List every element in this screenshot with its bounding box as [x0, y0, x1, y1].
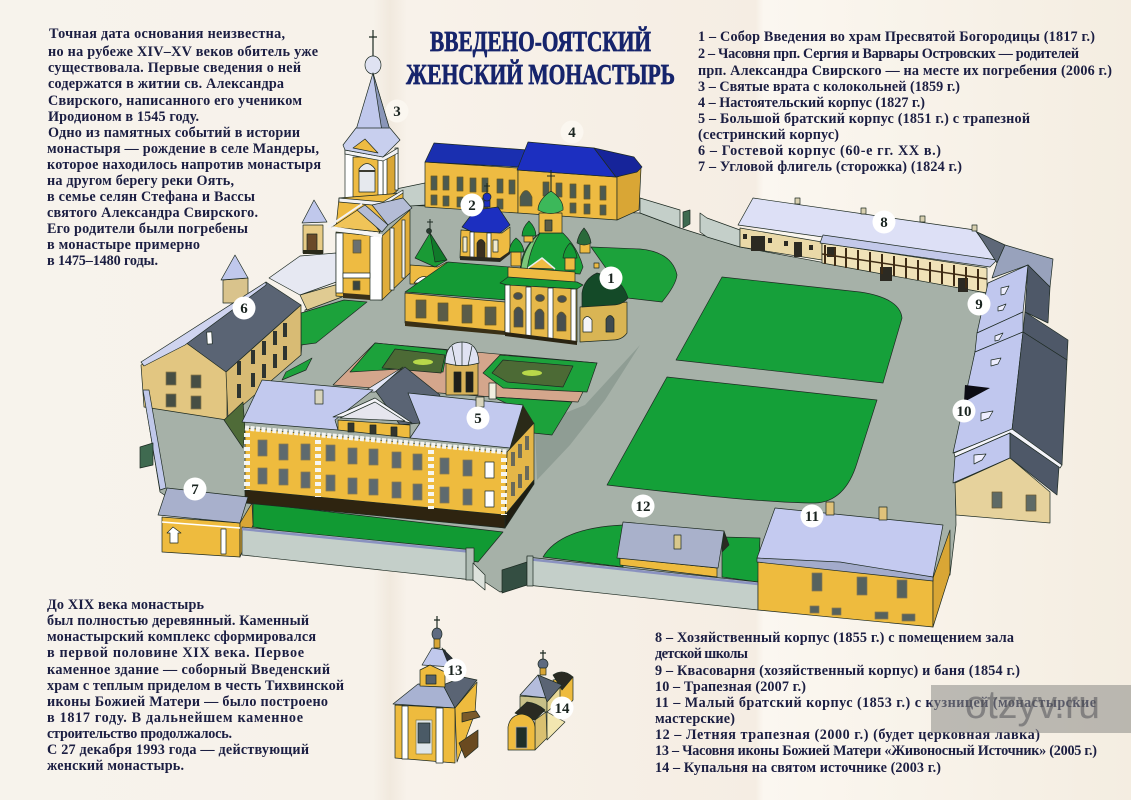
text block: 19th-century history: каменное здание — соборный Введенский — [47, 662, 330, 678]
legend: items 1–7: 6 – Гостевой корпус (60-е гг. XX в.) — [698, 143, 941, 159]
legend: items 1–7 — [698, 29, 1112, 175]
text block: monastery founding history: которое находилось напротив монастыря — [47, 157, 321, 173]
legend: items 1–7: 5 – Большой братский корпус (1851 г.) с трапезной — [698, 111, 1030, 127]
text block: monastery founding history — [47, 26, 321, 269]
watermark — [931, 683, 1131, 733]
building 9 — [975, 232, 1068, 360]
building 4 — [425, 142, 642, 220]
chapel 2 — [460, 183, 510, 262]
text block: 19th-century history: в первой половине XIX века. Первое — [47, 645, 304, 661]
text block: 19th-century history: С 27 декабря 1993 года — действующий — [47, 742, 309, 758]
right parterre — [483, 355, 597, 392]
front — [245, 428, 507, 528]
lower lawn — [493, 397, 572, 435]
chapel 14 — [508, 650, 573, 750]
dark planting beside building 5 — [224, 402, 245, 448]
marker 3 — [386, 100, 408, 122]
cornice — [245, 428, 507, 452]
text block: monastery founding history: монастыря — рождение в селе Мандеры, — [47, 141, 319, 157]
marker 13: 13 — [448, 663, 462, 679]
building 5 — [242, 367, 534, 528]
portico pediment — [332, 207, 380, 232]
marker 3: 3 — [393, 104, 401, 120]
text block: 19th-century history — [47, 597, 344, 774]
marker 2: 2 — [468, 198, 476, 214]
marker 5 — [466, 406, 490, 430]
text block: 19th-century history: иконы Божией Матери — было построено — [47, 694, 328, 710]
marker 6 — [232, 296, 256, 320]
building 10 — [953, 332, 1067, 523]
marker 10: 10 — [956, 404, 972, 420]
marker 8 — [872, 210, 896, 234]
legend: items 8–14: детской школы — [655, 646, 748, 662]
text block: monastery founding history: существовала. Первые сведения о ней — [48, 60, 301, 76]
marker 4: 4 — [568, 125, 576, 141]
text block: 19th-century history: был полностью деревянный. Каменный — [47, 613, 309, 629]
lawn: behind cathedral — [591, 247, 677, 302]
windows — [258, 440, 472, 505]
legend: items 8–14 — [655, 630, 1097, 776]
left parterre — [350, 343, 447, 372]
chapel 13 — [393, 616, 480, 763]
legend: items 1–7: (сестринский корпус) — [698, 127, 839, 143]
cathedral 1 — [405, 170, 628, 345]
back walls and gates — [396, 183, 740, 247]
lower tier side — [382, 210, 410, 300]
upper tier — [383, 148, 398, 202]
lawn: by tower — [301, 300, 367, 345]
garden — [333, 343, 597, 435]
marker 9: 9 — [975, 297, 983, 313]
center pediment — [338, 420, 410, 438]
title — [406, 27, 675, 91]
front walls and gates — [242, 527, 758, 610]
gazebo — [445, 342, 479, 395]
marker 4 — [560, 120, 584, 144]
marker 11: 11 — [805, 509, 819, 525]
building 12 — [617, 522, 729, 577]
lawn: upper square — [676, 277, 902, 383]
holy gate — [410, 219, 447, 284]
text block: monastery founding history: Его родители были погребены — [47, 221, 248, 237]
side windows — [511, 436, 529, 496]
middle tier — [336, 193, 403, 232]
legend: items 8–14: 13 – Часовня иконы Божией Матери «Живоносный Источник» (2005 г.) — [655, 743, 1097, 759]
marker 9 — [968, 292, 990, 316]
main roof — [242, 380, 373, 430]
marker 10 — [952, 400, 976, 422]
text block: monastery founding history: но на рубеже XIV–XV веков обитель уже — [48, 44, 318, 60]
attic and portico — [508, 267, 575, 283]
text block: monastery founding history: в монастыре примерно — [47, 237, 200, 253]
left wall and gate — [140, 390, 166, 490]
marker 8: 8 — [880, 215, 888, 231]
eave and small gable — [343, 128, 400, 157]
marker 5: 5 — [474, 411, 482, 427]
text block: monastery founding history: содержатся в житии св. Александра — [48, 76, 284, 92]
legend: items 8–14: 10 – Трапезная (2007 г.) — [655, 679, 806, 695]
text block: monastery founding history: в семье селян Стефана и Вассы — [47, 189, 255, 205]
text block: monastery founding history: в 1475–1480 годы. — [47, 253, 158, 269]
title: ВВЕДЕНО-ОЯТСКИЙ — [430, 27, 651, 58]
legend: items 1–7: 2 – Часовня прп. Сергия и Варвары Островских — родителей — [698, 46, 1079, 62]
marker 12 — [632, 494, 654, 518]
lawn: left of building 12 — [543, 525, 623, 567]
lawn: small strips — [282, 358, 312, 380]
building 6 — [141, 282, 301, 420]
marker 14: 14 — [554, 701, 570, 717]
lawn: front of building 5 — [253, 503, 503, 562]
marker 12: 12 — [636, 499, 650, 515]
marker 14 — [550, 696, 574, 720]
rear dark roof — [375, 367, 440, 425]
text block: 19th-century history: храм с теплым приделом в честь Тихвинской — [47, 678, 344, 694]
quoins — [247, 433, 504, 515]
legend: items 1–7: 4 – Настоятельский корпус (1827 г.) — [698, 95, 925, 111]
legend: items 8–14: 8 – Хозяйственный корпус (1855 г.) с помещением зала — [655, 630, 1014, 646]
marker 1 — [600, 266, 622, 290]
text block: monastery founding history: Точная дата основания неизвестна, — [49, 26, 285, 42]
side wing with small towers — [221, 200, 342, 310]
legend: items 8–14: мастерские) — [655, 711, 735, 727]
apse — [580, 302, 627, 342]
main dome — [520, 233, 583, 274]
lower tier front — [336, 232, 382, 300]
garden path — [333, 343, 597, 402]
text block: 19th-century history: женский монастырь. — [47, 758, 184, 774]
nave — [405, 262, 510, 300]
legend: items 8–14: 11 – Малый братский корпус (1853 г.) с кузницей (монастырские — [655, 695, 1096, 711]
courtyard ground — [145, 205, 987, 604]
legend: items 1–7: 1 – Собор Введения во храм Пресвятой Богородицы (1817 г.) — [698, 29, 1095, 45]
legend: items 1–7: 3 – Святые врата с колокольней (1859 г.) — [698, 79, 960, 95]
marker 13 — [444, 658, 466, 682]
text block: monastery founding history: Иродионом в 1545 году. — [48, 109, 199, 125]
marker 1: 1 — [607, 271, 615, 287]
building 11 — [757, 502, 950, 627]
marker 11 — [800, 504, 824, 528]
legend: items 1–7: прп. Александра Свирского — на месте их погребения (2006 г.) — [698, 63, 1112, 79]
text block: monastery founding history: Одно из памятных событий в истории — [48, 125, 300, 141]
lawn: right of building 12 — [722, 537, 760, 582]
map: monastery site plan — [140, 30, 1068, 627]
marker 7 — [184, 478, 206, 500]
marker 7: 7 — [191, 482, 199, 498]
text block: monastery founding history: святого Александра Свирского. — [47, 205, 258, 221]
text block: 19th-century history: монастырский комплекс сформировался — [47, 629, 316, 645]
marker 2 — [460, 194, 484, 216]
text block: monastery founding history: на другом берегу реки Оять, — [47, 173, 234, 189]
watermark: otzyv.ru — [965, 683, 1100, 727]
text block: monastery founding history: Свирского, написанного его учеником — [48, 93, 302, 109]
bell tower 3 — [328, 30, 412, 300]
legend: items 1–7: 7 – Угловой флигель (сторожка) (1824 г.) — [698, 159, 962, 175]
building 8 — [738, 198, 997, 293]
text block: 19th-century history: в 1817 году. В дальнейшем каменное — [47, 710, 303, 726]
lawn: lower square — [607, 377, 877, 503]
legend: items 8–14: 12 – Летняя трапезная (2000 г.) (будет церковная лавка) — [655, 727, 1040, 743]
building 7 — [158, 488, 253, 557]
legend: items 8–14: 9 – Квасоварня (хозяйственный корпус) и баня (1854 г.) — [655, 663, 1020, 679]
text block: 19th-century history: строительство продолжалось. — [47, 726, 232, 742]
small cupolas — [509, 221, 599, 270]
number markers — [184, 100, 990, 720]
legend: items 8–14: 14 – Купальня на святом источнике (2003 г.) — [655, 760, 941, 776]
title: ЖЕНСКИЙ МОНАСТЫРЬ — [406, 60, 675, 91]
courtyard shadow — [535, 345, 640, 480]
right side — [505, 423, 534, 515]
spire and cross — [369, 30, 377, 56]
marker 6: 6 — [240, 301, 248, 317]
text block: 19th-century history: До XIX века монастырь — [47, 597, 204, 613]
